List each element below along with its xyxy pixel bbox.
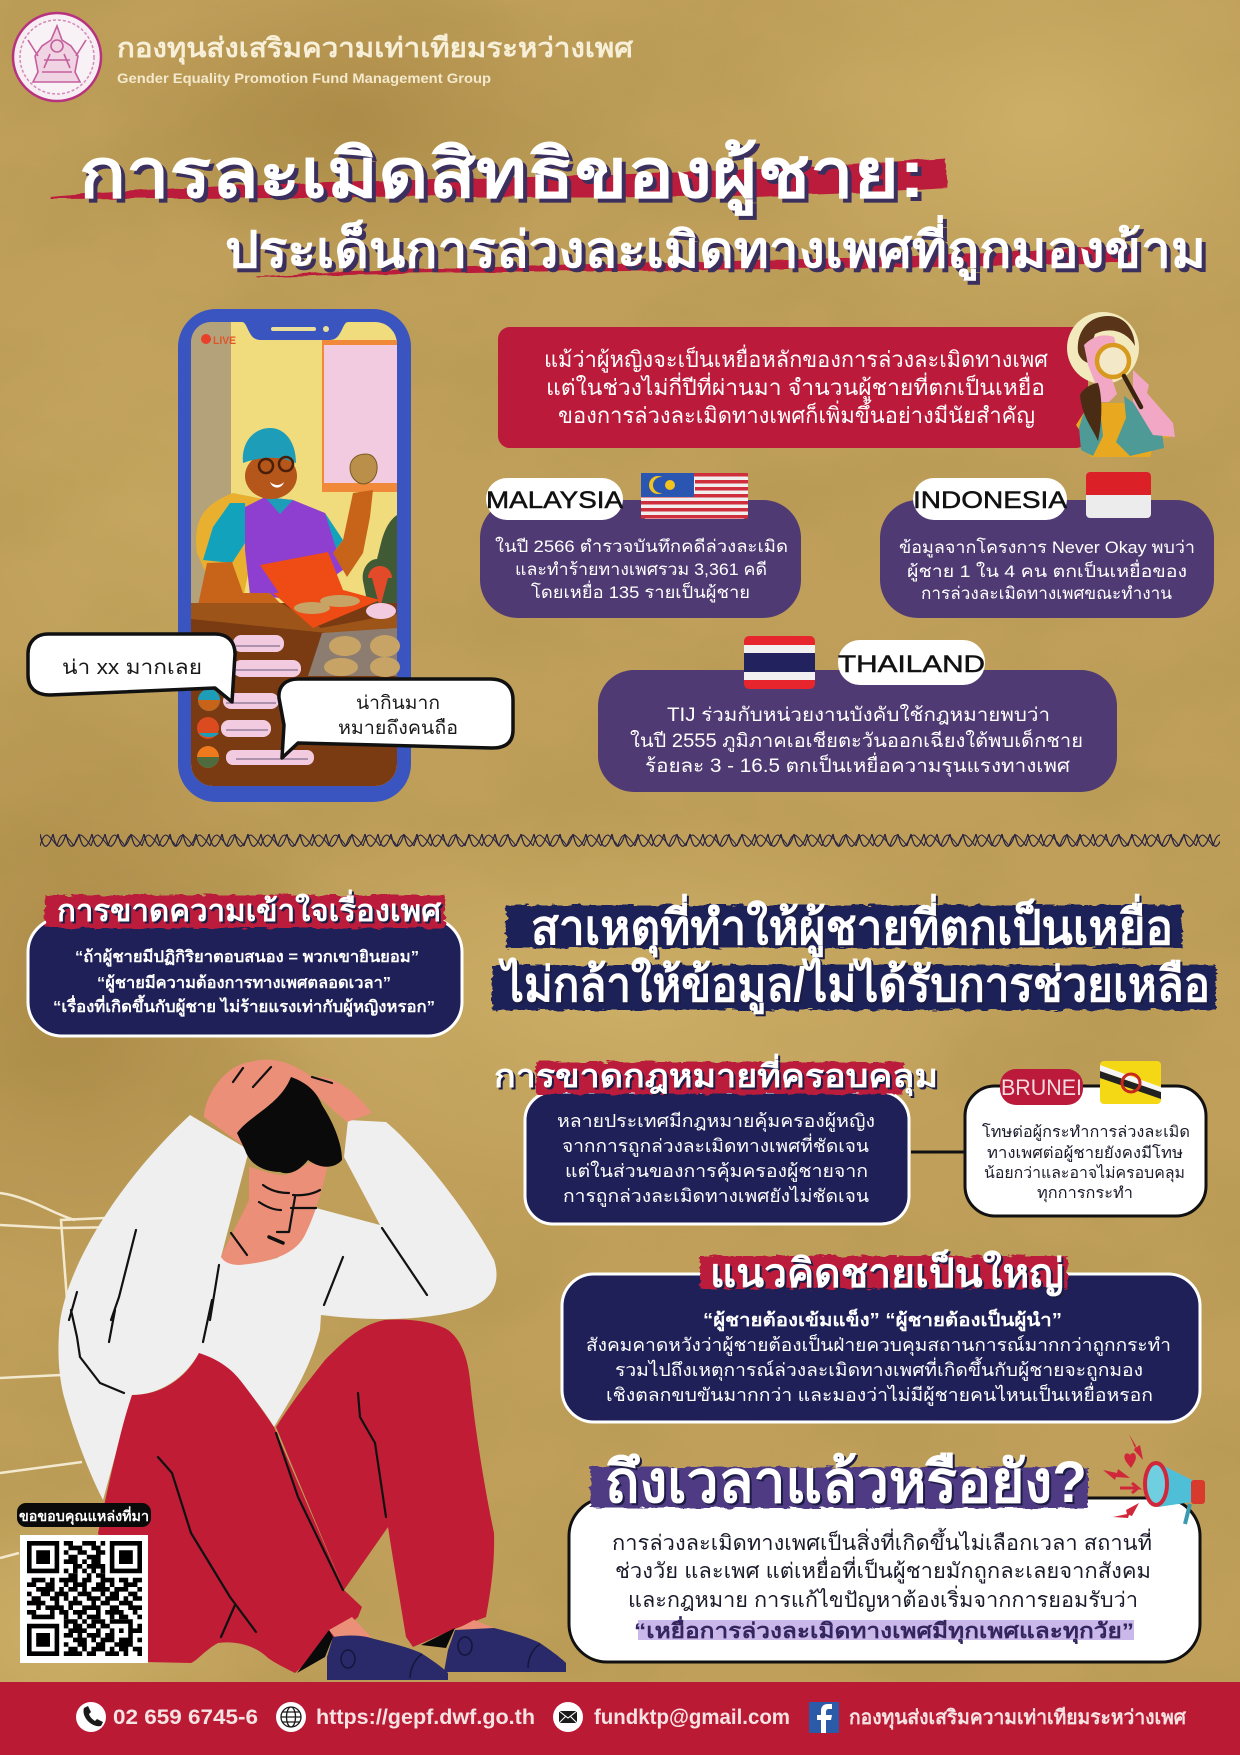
header: organisation name: กองทุนส่งเสริมความเท่าเทียมระหว่างเพศ (117, 33, 634, 65)
sweater (58, 1115, 497, 1500)
box of cookies (260, 552, 343, 596)
contact: phone (76, 1702, 258, 1732)
panel: Thailand: ในปี 2555 ภูมิภาคเอเชียตะวันออกเฉียงใต้พบเด็กชาย (630, 728, 1083, 752)
contact: website (276, 1702, 535, 1732)
cause panel: patriarchal mindset: เชิงตลกขบขันมากกว่า และมองว่าไม่มีผู้ชายคนไหนเป็นเหยื่อหรอก (606, 1382, 1153, 1406)
Malaysia label (486, 478, 623, 520)
contact: facebook (809, 1702, 1187, 1733)
Thailand label: THAILAND (838, 651, 985, 678)
cause panel: patriarchal mindset: “ผู้ชายต้องเข้มแข็ง” “ผู้ชายต้องเป็นผู้นำ” (703, 1308, 1062, 1332)
head, hat, glasses (245, 453, 297, 499)
conclusion panel: ช่วงวัย และเพศ แต่เหยื่อที่เป็นผู้ชายมักถูกละเลยจากสังคม (615, 1556, 1151, 1584)
Indonesia label (913, 478, 1067, 520)
right ankle and shoe (455, 1620, 494, 1630)
table (191, 603, 397, 786)
source label: ขอขอบคุณแหล่งที่มา (19, 1506, 149, 1525)
sleeves and vest (203, 503, 247, 563)
QR code (20, 1535, 148, 1663)
panel: Malaysia: และทำร้ายทางเพศรวม 3,361 คดี (515, 560, 767, 579)
speech bubble: comment 1: น่า xx มากเลย (62, 657, 202, 679)
Thailand label (838, 640, 985, 685)
conclusion panel: “เหยื่อการล่วงละเมิดทางเพศมีทุกเพศและทุกวัย” (634, 1615, 1134, 1645)
cause panel: patriarchal mindset: แนวคิดชายเป็นใหญ่ (710, 1248, 1064, 1297)
panel: Brunei: ทางเพศต่อผู้ชายยังคงมีโทษ (987, 1144, 1183, 1163)
panel: Thailand: TIJ ร่วมกับหน่วยงานบังคับใช้กฎหมายพบว่า (667, 704, 1050, 726)
cause panel: lack of covering law: การถูกล่วงละเมิดทางเพศยังไม่ชัดเจน (563, 1185, 869, 1207)
cause panel: lack of sexual understanding: “เรื่องที่เกิดขึ้นกับผู้ชาย ไม่ร้ายแรงเท่ากับผู้หญิงหรอก” (53, 994, 435, 1018)
arms (197, 562, 287, 617)
Indonesia label: INDONESIA (913, 487, 1067, 514)
source label (17, 1503, 151, 1527)
facial lines (231, 1067, 332, 1255)
conclusion panel: ถึงเวลาแล้วหรือยัง? (605, 1450, 1087, 1515)
patriarchy heading brush (700, 1256, 1068, 1289)
conclusion panel: การล่วงละเมิดทางเพศเป็นสิ่งที่เกิดขึ้นไม่เลือกเวลา สถานที่ (612, 1528, 1152, 1555)
law heading brush (536, 1062, 904, 1094)
cause heading brush (45, 895, 445, 928)
panel: Thailand: ร้อยละ 3 - 16.5 ตกเป็นเหยื่อความรุนแรงทางเพศ (645, 752, 1070, 778)
left ankle and shoe (329, 1617, 371, 1640)
hands (204, 1060, 372, 1150)
intro callout: แต่ในช่วงไม่กี่ปีที่ผ่านมา จำนวนผู้ชายที่ตกเป็นเหยื่อ (546, 372, 1045, 401)
conclusion heading brush (590, 1467, 1088, 1508)
panel: Brunei: ทุกการกระทำ (1037, 1185, 1133, 1203)
chat comments (221, 635, 314, 765)
panel: Brunei: โทษต่อผู้กระทำการล่วงละเมิด (982, 1123, 1190, 1142)
contact: email: fundktp@gmail.com (594, 1706, 790, 1729)
live badge: LIVE (213, 335, 236, 347)
cause panel: lack of sexual understanding (28, 889, 462, 1036)
Malaysia label: MALAYSIA (486, 487, 623, 514)
intro callout: ของการล่วงละเมิดทางเพศก็เพิ่มขึ้นอย่างมีนัยสำคัญ (558, 400, 1035, 428)
title block (50, 136, 1206, 281)
cause panel: lack of covering law: แต่ในส่วนของการคุ้มครองผู้ชายจาก (565, 1160, 868, 1182)
contact: facebook: กองทุนส่งเสริมความเท่าเทียมระหว่างเพศ (849, 1706, 1187, 1730)
cause panel: patriarchal mindset (562, 1248, 1200, 1422)
arm (1133, 370, 1175, 437)
contact: email (553, 1702, 790, 1732)
vest (1079, 396, 1164, 456)
cause panel: lack of covering law: จากการถูกล่วงละเมิดทางเพศที่ชัดเจน (562, 1133, 869, 1157)
header: organisation logo (13, 13, 101, 101)
chair (196, 493, 263, 599)
tray of cookies (308, 628, 397, 676)
header: organisation name: Gender Equality Promotion Fund Management Group (117, 70, 491, 86)
intro callout: แม้ว่าผู้หญิงจะเป็นเหยื่อหลักของการล่วงละเมิดทางเพศ (544, 344, 1048, 373)
speech bubble: comment 2 (279, 679, 513, 758)
face (221, 1163, 328, 1265)
cause panel: lack of sexual understanding: การขาดความเข้าใจเรื่องเพศ (57, 889, 442, 928)
chat avatars (197, 689, 220, 768)
title line 1: การละเมิดสิทธิของผู้ชาย: (79, 136, 925, 217)
intro callout (498, 327, 1088, 448)
panel: Thailand (598, 636, 1117, 792)
flag: Malaysia (641, 473, 748, 519)
icon: woman with magnifying glass (1067, 312, 1175, 457)
speech icon (366, 603, 396, 619)
live badge (201, 334, 236, 347)
panel: Indonesia: การล่วงละเมิดทางเพศขณะทำงาน (921, 584, 1172, 603)
speech bubble: comment 2: หมายถึงคนถือ (338, 718, 458, 739)
Brunei label (1000, 1069, 1083, 1105)
cause panel: lack of sexual understanding: “ผู้ชายมีความต้องการทางเพศตลอดเวลา” (97, 973, 391, 994)
flag: Thailand (744, 636, 815, 689)
cause panel: lack of covering law (494, 1053, 938, 1224)
cookie held up (350, 454, 377, 484)
cause panel: lack of covering law: หลายประเทศมีกฎหมายคุ้มครองผู้หญิง (557, 1111, 875, 1132)
speech bubble: comment 1 (28, 634, 235, 702)
panel: Malaysia: โดยเหยื่อ 135 รายเป็นผู้ชาย (531, 580, 750, 603)
cause panel: lack of sexual understanding: “ถ้าผู้ชายมีปฏิกิริยาตอบสนอง = พวกเขายินยอม” (75, 947, 419, 968)
flag: Indonesia (1086, 472, 1151, 518)
panel: Malaysia: ในปี 2566 ตำรวจบันทึกคดีล่วงละเมิด (495, 536, 788, 556)
Brunei label: BRUNEI (1001, 1075, 1082, 1100)
title line 2: ประเด็นการล่วงละเมิดทางเพศที่ถูกมองข้าม (225, 215, 1206, 281)
footer band (0, 1682, 1240, 1755)
trouser lines (158, 1393, 386, 1637)
hair (237, 1077, 342, 1173)
panel: Indonesia: ผู้ชาย 1 ใน 4 คน ตกเป็นเหยื่อของ (907, 559, 1187, 582)
cause panel: patriarchal mindset: รวมไปถึงเหตุการณ์ล่วงละเมิดทางเพศที่เกิดขึ้นกับผู้ชายจะถูกมอง (615, 1357, 1143, 1381)
illustration: distressed man (0, 1060, 566, 1680)
conclusion panel (569, 1450, 1200, 1662)
phone illustration: live stream (178, 309, 411, 802)
plant (363, 515, 397, 633)
header: organisation name (117, 33, 634, 86)
icon: megaphone (1103, 1434, 1205, 1524)
braid (1080, 383, 1101, 441)
panel: Malaysia (480, 473, 801, 618)
panel: Indonesia (880, 472, 1214, 618)
sweater wrinkles (69, 1228, 427, 1393)
cause panel: lack of covering law: การขาดกฎหมายที่ครอบคลุม (494, 1053, 938, 1097)
panel: Brunei (965, 1061, 1206, 1216)
section heading: reasons (492, 893, 1216, 1015)
section heading: reasons: สาเหตุที่ทำให้ผู้ชายที่ตกเป็นเหยื่อ (531, 893, 1173, 958)
right trouser leg (276, 1319, 494, 1647)
speech bubble: comment 2: น่ากินมาก (356, 693, 440, 714)
conclusion panel: และกฎหมาย การแก้ไขปัญหาต้องเริ่มจากการยอมรับว่า (628, 1585, 1138, 1612)
contact: website: https://gepf.dwf.go.th (316, 1706, 535, 1729)
panel: Brunei: น้อยกว่าและอาจไม่ครอบคลุม (984, 1164, 1185, 1183)
cause panel: patriarchal mindset: สังคมคาดหวังว่าผู้ชายต้องเป็นฝ่ายควบคุมสถานการณ์มากกว่าถูกกระทำ (586, 1333, 1171, 1356)
contact: phone: 02 659 6745-6 (113, 1706, 258, 1729)
chair lines (0, 1193, 127, 1558)
flag: Brunei (1100, 1061, 1161, 1104)
panel: Indonesia: ข้อมูลจากโครงการ Never Okay พบว่า (899, 537, 1195, 558)
left trouser leg (98, 1353, 362, 1673)
shirt (1076, 403, 1172, 457)
